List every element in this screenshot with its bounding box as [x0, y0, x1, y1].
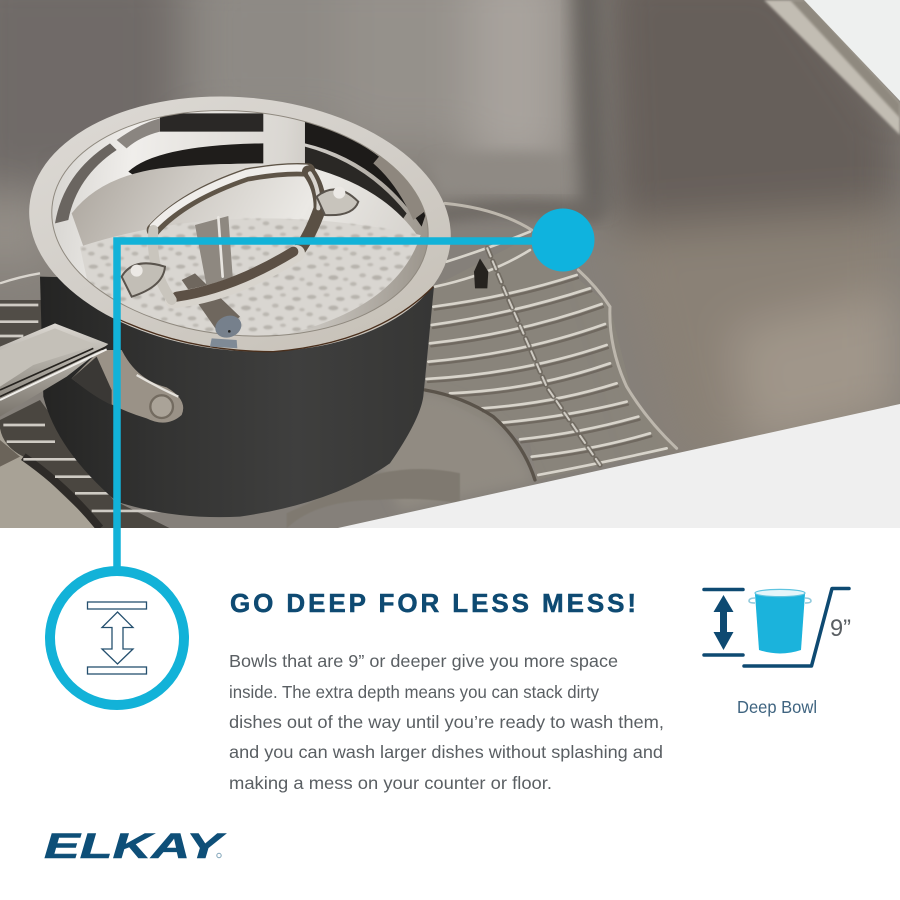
photo: stainless sink with pot: [0, 0, 900, 530]
lid handle and vent: [153, 168, 320, 348]
side bracket and pan handle: [0, 323, 183, 423]
background round rack ring: [287, 469, 460, 528]
lid inner wall: [57, 111, 428, 334]
bucket: [749, 589, 811, 654]
measure arrow: [714, 595, 734, 650]
copper edge shadow: [117, 287, 433, 352]
callout dot: [532, 208, 594, 272]
body text: making a mess on your counter or floor.: [229, 773, 552, 793]
dark drain spot: [474, 258, 488, 288]
body text: dishes out of the way until you’re ready to wash them,: [229, 712, 664, 732]
white counter: [338, 404, 900, 528]
connector line from sink to icon: [117, 241, 563, 572]
logo: ELKAY: [44, 827, 226, 866]
left lower rack and floor: [0, 300, 183, 530]
body text: inside. The extra depth means you can stack dirty: [229, 682, 599, 702]
handle bars: [153, 170, 308, 230]
body text: and you can wash larger dishes without splashing and: [229, 742, 663, 762]
pot and lid: [0, 79, 462, 528]
inner circular rim: [425, 390, 535, 480]
icon: double arrow: [102, 612, 133, 664]
pot body: [40, 277, 434, 517]
lid outer rim: [29, 96, 451, 352]
sink basin background: [0, 0, 900, 528]
rack spine: [487, 248, 600, 465]
inner wall reflections: [55, 143, 117, 223]
right wire rack: [425, 203, 677, 480]
lower basin floor under rack: [384, 396, 528, 505]
lid rivets: [122, 187, 358, 297]
icon: bottom bar: [88, 667, 146, 674]
deep bowl diagram: [704, 588, 851, 717]
outer rim: [445, 203, 677, 448]
sink profile: [744, 588, 849, 666]
body text: Bowls that are 9” or deeper give you more space: [229, 651, 618, 671]
depth label: 9”: [830, 615, 851, 642]
hammered texture: [80, 218, 421, 337]
logo: [44, 827, 226, 866]
icon: top bar: [88, 602, 146, 609]
vent shaft: [195, 216, 233, 287]
curved ledge of sink: [486, 152, 548, 168]
body text: [229, 651, 664, 793]
counter edge top right: [764, 0, 900, 135]
caption: Deep Bowl: [737, 697, 817, 717]
flat lid top: [72, 164, 416, 246]
depth icon badge: [50, 571, 184, 705]
measure bars: [704, 590, 743, 655]
heading: GO DEEP FOR LESS MESS!: [230, 588, 636, 618]
lid rim inner line: [51, 110, 429, 337]
second dark band: [128, 143, 263, 175]
